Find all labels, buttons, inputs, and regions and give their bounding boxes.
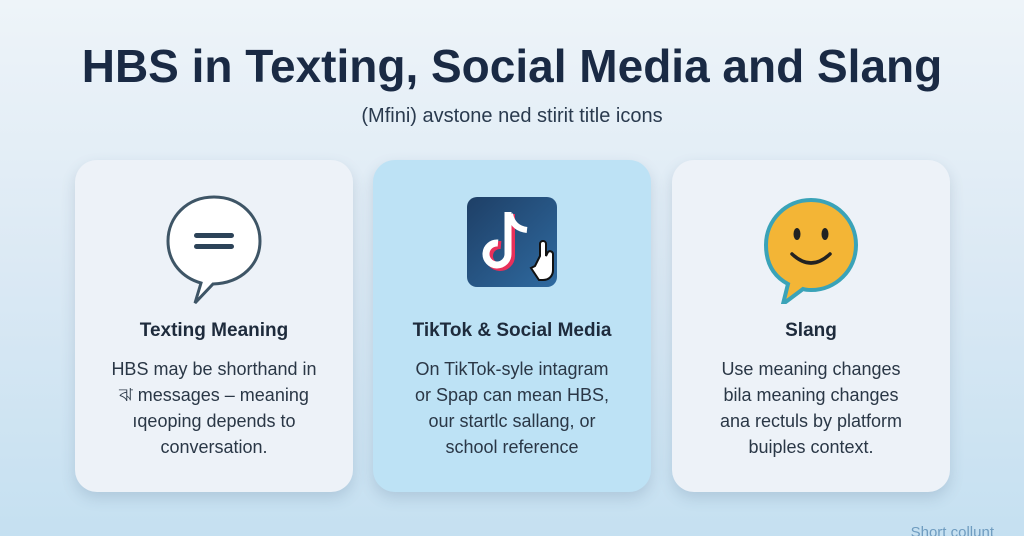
text: bila meaning changes	[723, 385, 899, 405]
text: HBS may be shorthand in ঝ messages – meaning ıqeoping depends to conversation.	[111, 359, 317, 457]
icon: speech bubble	[166, 196, 262, 304]
text: On TikTok-syle intagram or Spap can mean HBS, our startlc sallang, or school reference	[415, 359, 609, 457]
text: buiples context.	[748, 437, 874, 457]
text: Use meaning changes	[721, 359, 901, 379]
title: HBS in Texting, Social Media and Slang	[82, 40, 942, 92]
heading: Slang	[785, 320, 837, 341]
icon: tiktok app	[467, 197, 557, 287]
text: ana rectuls by platform	[720, 411, 902, 431]
text	[720, 359, 902, 457]
panel: texting meaning	[75, 160, 353, 492]
panel: tiktok	[373, 160, 651, 492]
heading: TikTok & Social Media	[413, 320, 611, 341]
icon: smiley bubble	[764, 198, 858, 304]
subtitle: (Mfini) avstone ned stirit title icons	[361, 105, 663, 127]
panel: slang	[672, 160, 950, 492]
heading: Texting Meaning	[140, 320, 288, 341]
